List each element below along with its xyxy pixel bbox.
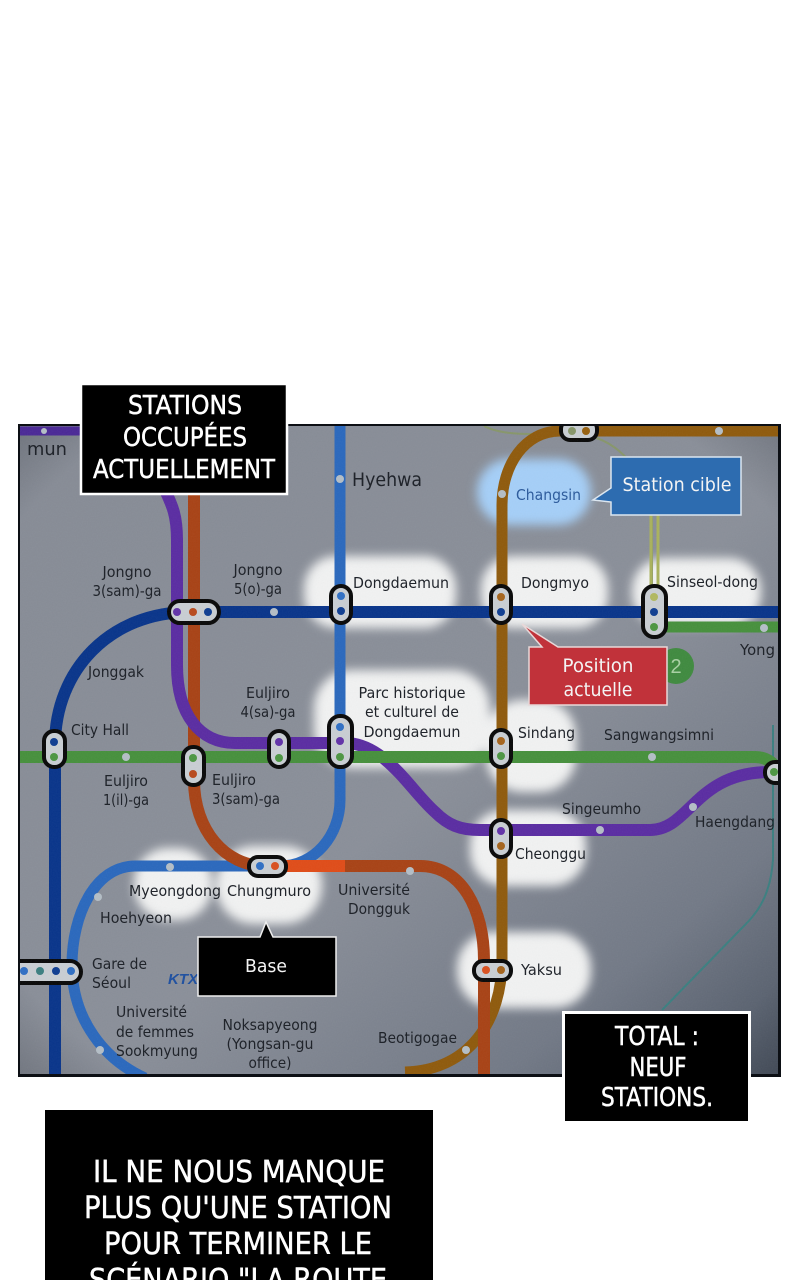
callout: total neuf stations: STATIONS. xyxy=(601,1083,713,1113)
callout: position actuelle: Position xyxy=(562,655,634,677)
station name labels: Université xyxy=(116,1003,187,1021)
metro lines xyxy=(20,424,782,1078)
panel: subway map xyxy=(10,420,795,1078)
callout: base: Base xyxy=(245,956,287,977)
line 2 badge xyxy=(668,648,694,684)
callout: stations occupées actuellement: OCCUPÉES xyxy=(123,421,247,453)
callout: base xyxy=(198,922,336,996)
station name labels: de femmes xyxy=(116,1023,194,1041)
station name labels: Chungmuro xyxy=(227,882,311,900)
paper noise texture xyxy=(20,426,778,1074)
station name labels: et culturel de xyxy=(365,703,459,721)
station name labels: Myeongdong xyxy=(129,882,221,900)
callout: position actuelle xyxy=(522,624,667,705)
station name labels: Jonggak xyxy=(87,663,144,681)
callout: station cible xyxy=(593,457,741,515)
station name labels: 3(sam)-ga xyxy=(212,790,280,808)
station name labels: Sangwangsimni xyxy=(604,726,714,744)
station name labels: office) xyxy=(248,1054,292,1072)
small station dots xyxy=(41,427,768,1054)
caption: bottom narration box xyxy=(45,1110,433,1280)
station name labels: (Yongsan-gu xyxy=(226,1035,314,1053)
station name labels: Singeumho xyxy=(562,800,641,818)
station name labels: Beotigogae xyxy=(378,1029,457,1047)
station name labels: Sinseol-dong xyxy=(667,573,758,591)
station name labels: Dongdaemun xyxy=(364,723,460,741)
station name labels: Gare de xyxy=(92,955,147,973)
line 2 badge: 2 xyxy=(670,656,682,678)
callout: stations occupées actuellement xyxy=(81,384,287,494)
station name labels: Euljiro xyxy=(212,771,256,789)
station name labels: Séoul xyxy=(92,974,131,992)
station name labels: Dongguk xyxy=(348,900,410,918)
station name labels: 1(il)-ga xyxy=(103,791,149,809)
station name labels: Université xyxy=(338,881,410,899)
callout: station cible: Station cible xyxy=(622,474,732,496)
station name labels: 5(o)-ga xyxy=(234,580,282,598)
station name labels: Parc historique xyxy=(358,684,466,702)
callout: stations occupées actuellement: STATIONS xyxy=(128,391,242,421)
station name labels: Changsin xyxy=(516,486,581,504)
caption: bottom narration box: PLUS QU'UNE STATION xyxy=(84,1191,392,1226)
callout: position actuelle: actuelle xyxy=(564,679,632,701)
station name labels: Jongno xyxy=(102,563,152,581)
station name labels: mun xyxy=(27,439,67,460)
station name labels xyxy=(27,439,775,1072)
station name labels: Jongno xyxy=(233,561,282,579)
station name labels: Euljiro xyxy=(246,684,290,702)
infographic canvas xyxy=(18,385,781,1280)
station name labels: 3(sam)-ga xyxy=(92,582,162,600)
station name labels: Yaksu xyxy=(520,961,562,979)
station name labels: Euljiro xyxy=(104,772,148,790)
KTX logo: KTX xyxy=(168,971,199,988)
callout: stations occupées actuellement: ACTUELLEMENT xyxy=(93,455,275,485)
callout: total neuf stations: NEUF xyxy=(630,1053,686,1083)
station name labels: Noksapyeong xyxy=(222,1016,318,1034)
station name labels: City Hall xyxy=(71,721,129,739)
highlight glows behind stations xyxy=(134,459,761,1008)
station name labels: Cheonggu xyxy=(515,845,586,863)
station name labels: Hoehyeon xyxy=(100,909,172,927)
callout: total neuf stations xyxy=(564,1012,750,1122)
station name labels: Sookmyung xyxy=(116,1042,198,1060)
callout: total neuf stations: TOTAL : xyxy=(614,1022,699,1052)
station name labels: Haengdang xyxy=(695,813,775,831)
interchange stations xyxy=(10,420,795,983)
caption: bottom narration box: POUR TERMINER LE xyxy=(104,1227,372,1262)
station name labels: 4(sa)-ga xyxy=(240,703,296,721)
station name labels: Yong xyxy=(739,641,775,659)
station name labels: Dongdaemun xyxy=(353,574,449,592)
station name labels: Sindang xyxy=(518,724,575,742)
caption: bottom narration box: IL NE NOUS MANQUE xyxy=(93,1155,385,1190)
station name labels: Dongmyo xyxy=(521,574,589,592)
station name labels: Hyehwa xyxy=(352,469,422,491)
